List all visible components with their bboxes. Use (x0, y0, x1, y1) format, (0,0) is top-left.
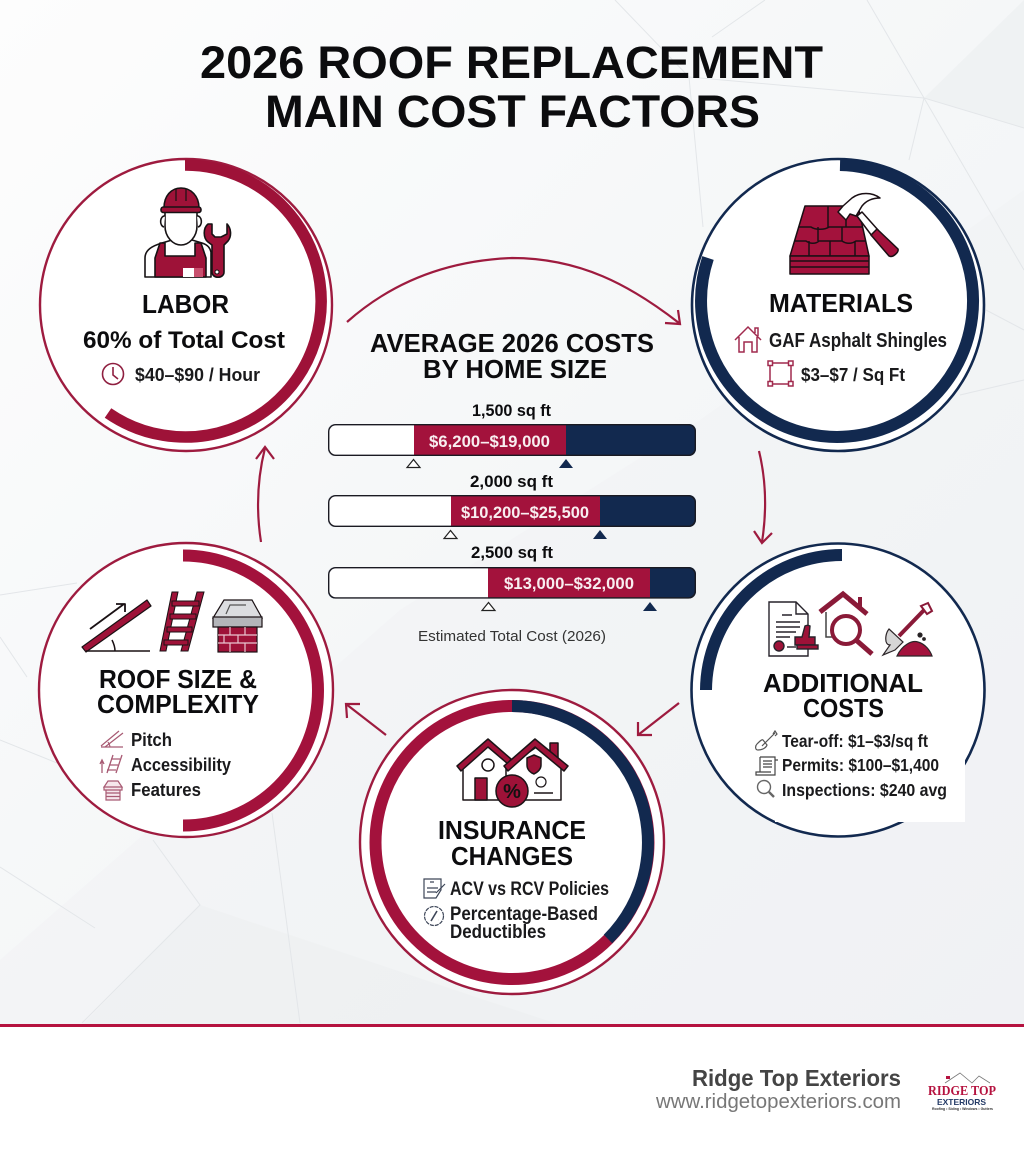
panel: insurance changes (360, 690, 664, 994)
chart heading: BY HOME SIZE (423, 354, 607, 384)
deductible types: Percentage-Based (450, 904, 598, 925)
icon: clock (102, 364, 124, 384)
bar: 2,000 sq ft: 2,000 sq ft (470, 473, 554, 491)
material name: GAF Asphalt Shingles (769, 330, 947, 352)
heading (763, 668, 923, 723)
panel: labor (40, 159, 332, 451)
price per square foot: $3–$7 / Sq Ft (801, 365, 905, 385)
bar: 1,500 sq ft: $6,200–$19,000 (429, 432, 550, 451)
panel: roof size and complexity (39, 543, 333, 837)
heading: INSURANCE (438, 815, 586, 845)
icon: ladder (160, 592, 204, 651)
icon: permit document with stamp (769, 602, 818, 656)
heading: CHANGES (451, 841, 573, 871)
bar: 2,500 sq ft (328, 544, 696, 611)
bar: 2,000 sq ft: $10,200–$25,500 (461, 503, 589, 522)
icon: house inspection magnifier (820, 594, 872, 654)
arrow: additional costs to insurance (638, 703, 679, 735)
icon: small magnifier (758, 780, 774, 797)
icon: small shovel (756, 731, 777, 750)
title: 2026 ROOF REPLACEMENT (200, 37, 823, 88)
panel: materials (692, 159, 984, 451)
logo: EXTERIORS (937, 1097, 986, 1107)
icon: policy document (424, 879, 445, 898)
hourly rate: $40–$90 / Hour (135, 365, 260, 385)
deductible types (450, 904, 598, 943)
chart heading (370, 328, 654, 384)
heading: LABOR (142, 289, 229, 319)
panel: additional costs (692, 544, 984, 836)
arrow: insurance to roof size (346, 704, 386, 735)
icon: small scroll (756, 757, 778, 775)
bar: 1,500 sq ft: 1,500 sq ft (472, 402, 551, 420)
arrow: roof size to labor (256, 447, 274, 542)
heading (97, 664, 259, 719)
icon: area square (768, 361, 793, 386)
icon: percent badge (424, 906, 444, 926)
icon: shingled roof and hammer (780, 194, 898, 274)
icon: brick chimney (213, 600, 262, 652)
icon: roof pitch (82, 600, 151, 652)
heading: COMPLEXITY (97, 689, 259, 719)
chart caption: Estimated Total Cost (2026) (418, 629, 606, 645)
icon: house outline (735, 327, 761, 352)
bar: 2,500 sq ft: $13,000–$32,000 (504, 574, 634, 593)
icon: small ladder (100, 755, 122, 773)
arrow: labor to materials (347, 258, 680, 324)
logo: Roofing • Siding • Windows • Gutters (932, 1107, 993, 1111)
logo: RIDGE TOP (928, 1083, 996, 1098)
accessibility label: Accessibility (131, 755, 231, 775)
icon: shovel and debris (883, 603, 932, 656)
chart heading: AVERAGE 2026 COSTS (370, 328, 654, 358)
policy types: ACV vs RCV Policies (450, 879, 609, 900)
range bars chart (328, 402, 696, 611)
features label: Features (131, 780, 201, 800)
title: MAIN COST FACTORS (265, 86, 760, 137)
title (200, 37, 823, 137)
website: www.ridgetopexteriors.com (655, 1090, 901, 1113)
share of total cost: 60% of Total Cost (83, 327, 285, 354)
heading: ADDITIONAL (763, 668, 923, 698)
icon: two houses with percent badge: % (503, 781, 521, 803)
deductible types: Deductibles (450, 922, 546, 943)
company name: Ridge Top Exteriors (692, 1065, 901, 1091)
bar: 2,500 sq ft: 2,500 sq ft (471, 544, 553, 562)
heading: COSTS (803, 693, 884, 723)
icon: small chimney (104, 781, 122, 800)
permit cost: Permits: $100–$1,400 (782, 755, 939, 775)
icon: two houses with percent badge (457, 739, 568, 807)
tear-off cost: Tear-off: $1–$3/sq ft (782, 731, 928, 751)
heading: ROOF SIZE & (99, 664, 257, 694)
arrow: materials to additional costs (754, 451, 772, 543)
icon: construction worker with wrench (145, 188, 231, 277)
bar: 2,000 sq ft (328, 473, 696, 539)
footer (0, 1024, 1024, 1154)
heading (438, 815, 586, 871)
logo (928, 1073, 996, 1111)
icon: small pitch (101, 731, 123, 747)
heading: MATERIALS (769, 288, 913, 318)
bar: 1,500 sq ft (328, 402, 696, 468)
inspection cost: Inspections: $240 avg (782, 780, 947, 800)
pitch label: Pitch (131, 730, 172, 750)
